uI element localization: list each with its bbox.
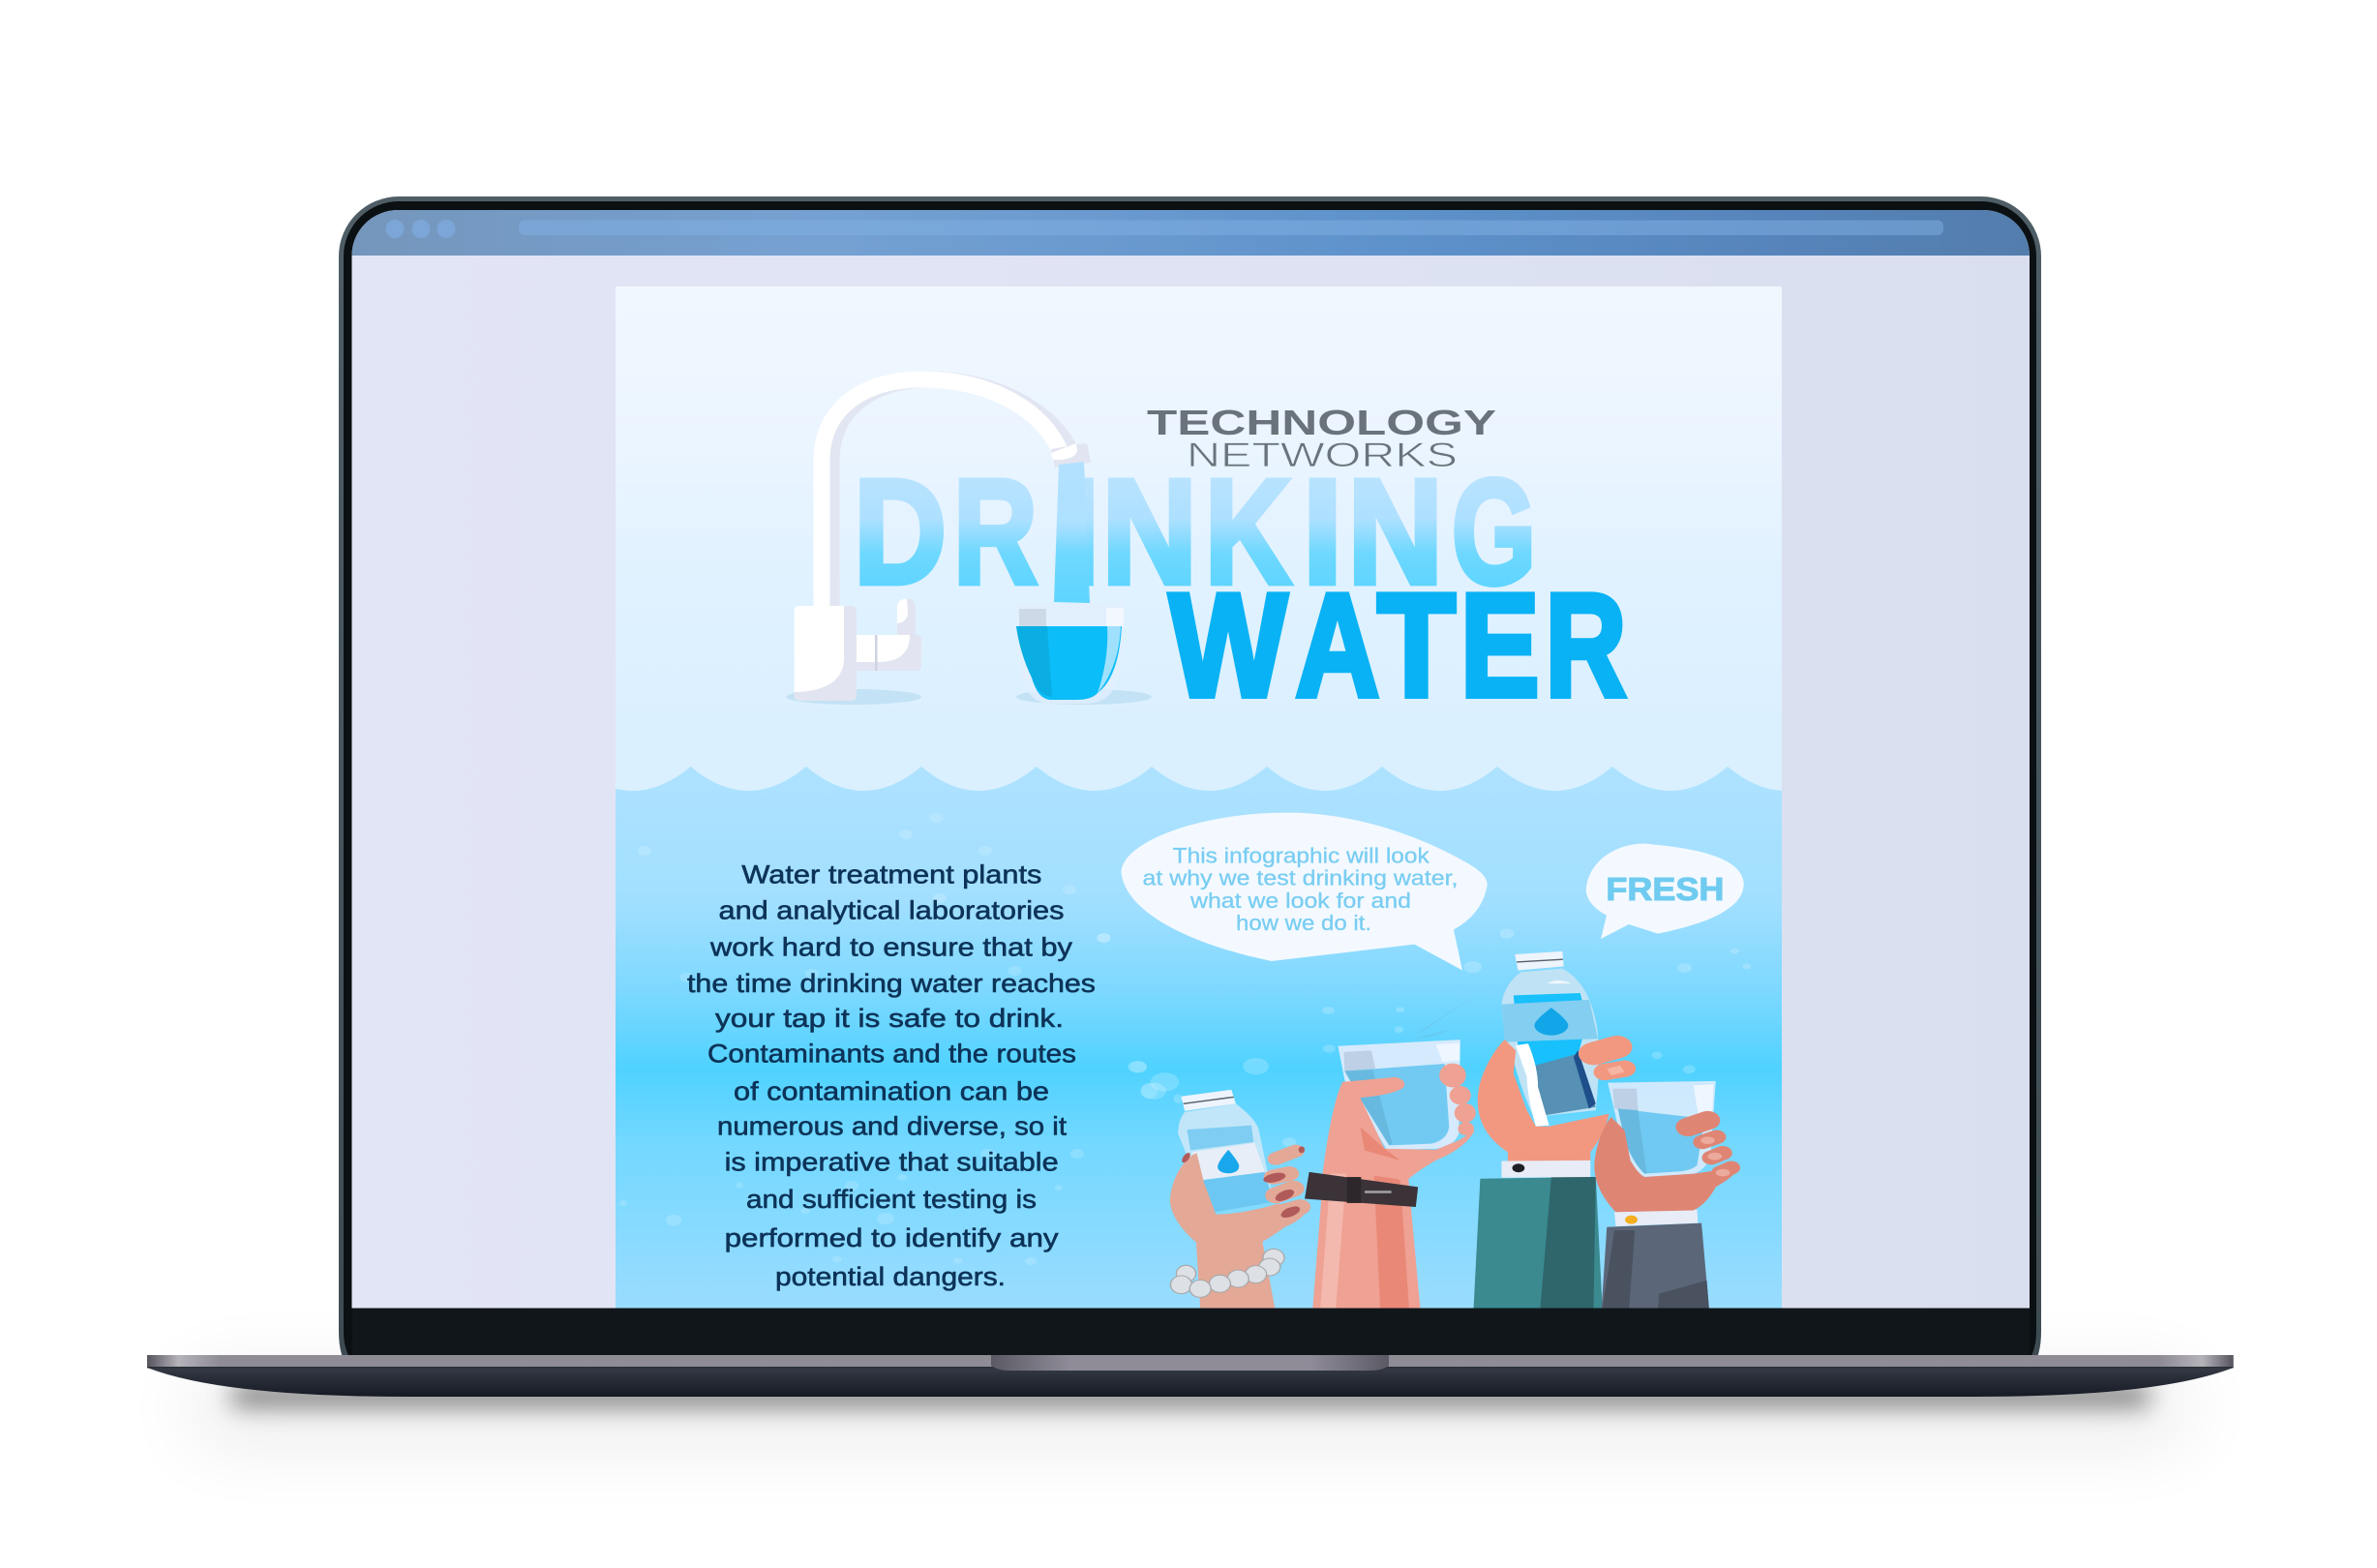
hinge notch	[991, 1355, 1389, 1371]
large bottle	[1501, 951, 1599, 1127]
title: water: A	[1295, 563, 1379, 728]
water background	[616, 765, 1782, 1309]
laptop lid frame	[339, 196, 2041, 1357]
intro paragraph: numerous and diverse, so it	[717, 1111, 1068, 1140]
hand	[1322, 1077, 1475, 1181]
glass water	[1344, 1064, 1449, 1145]
white cuff	[1614, 1210, 1698, 1226]
title: drinking: I	[1060, 448, 1100, 615]
forearm	[1196, 1237, 1275, 1309]
title: drinking: R	[953, 448, 1038, 615]
small bottle	[1178, 1090, 1274, 1213]
hand	[1594, 1117, 1740, 1212]
intro paragraph: Contaminants and the routes	[707, 1040, 1076, 1069]
hands illustration	[1097, 928, 1751, 1309]
faucet base	[795, 606, 857, 701]
white cuff	[1501, 1161, 1590, 1178]
green sleeve	[1474, 1177, 1603, 1309]
air bubbles	[619, 813, 1158, 1265]
splash lines	[1411, 996, 1475, 1039]
pearl bracelet	[1170, 1249, 1284, 1297]
address bar	[519, 221, 1943, 235]
fingers	[1274, 1151, 1300, 1212]
title: drinking: D	[854, 448, 947, 615]
faucet arch	[831, 379, 1072, 610]
wrist	[1617, 1204, 1695, 1213]
glass of water	[1014, 603, 1152, 705]
nails	[1180, 1146, 1305, 1220]
bubble text: how we do it.	[1236, 911, 1371, 935]
intro paragraph	[687, 859, 1096, 1291]
glass water	[1618, 1108, 1704, 1174]
title: drinking: N	[1347, 448, 1443, 615]
illustration bubbles	[1097, 928, 1751, 1147]
wrist	[1508, 1147, 1590, 1161]
faucet handle	[857, 599, 921, 671]
bubble text	[1142, 843, 1458, 935]
title: water: T	[1377, 563, 1456, 728]
intro paragraph: and analytical laboratories	[718, 895, 1065, 924]
palm	[1170, 1153, 1309, 1242]
intro paragraph: of contamination can be	[734, 1077, 1049, 1106]
bubble text: what we look for and	[1189, 889, 1411, 913]
title: drinking: I	[1303, 448, 1343, 615]
speech bubble: fresh	[1586, 844, 1744, 939]
bubble text: This infographic will look	[1173, 843, 1430, 867]
intro paragraph: Water treatment plants	[741, 859, 1041, 889]
intro paragraph: work hard to ensure that by	[709, 933, 1073, 962]
laptop	[147, 196, 2234, 1397]
title: water: R	[1545, 563, 1626, 728]
hand with small bottle	[1170, 1090, 1309, 1309]
water stream	[1054, 462, 1090, 603]
speech bubble: intro	[1121, 813, 1488, 970]
browser title bar	[352, 210, 2030, 256]
brand logo	[1148, 410, 1496, 467]
palm	[1478, 1040, 1610, 1152]
window dots	[385, 220, 455, 238]
hand with large bottle	[1474, 951, 1625, 1309]
glass water	[1016, 626, 1122, 700]
small glass	[1608, 1081, 1716, 1177]
title: drinking: N	[1101, 448, 1197, 615]
bubble text: at why we test drinking water,	[1142, 866, 1458, 890]
glass shadow	[1016, 689, 1152, 705]
title: drinking: G	[1452, 448, 1536, 615]
screen	[352, 210, 2030, 1309]
wave scallops	[616, 765, 1782, 791]
intro paragraph: and sufficient testing is	[746, 1185, 1037, 1214]
faucet	[786, 379, 1091, 705]
intro paragraph: the time drinking water reaches	[687, 969, 1096, 998]
fingers	[1688, 1121, 1731, 1173]
watch	[1305, 1172, 1418, 1207]
fingers	[1593, 1047, 1625, 1072]
intro paragraph: is imperative that suitable	[725, 1148, 1059, 1177]
laptop drop shadow	[194, 1374, 2187, 1442]
intro paragraph: potential dangers.	[775, 1262, 1006, 1291]
intro paragraph: performed to identify any	[725, 1223, 1059, 1252]
hand with large glass	[1305, 1040, 1476, 1309]
infographic page	[575, 286, 1843, 1309]
arm	[1312, 1167, 1420, 1309]
faucet shadow	[786, 689, 921, 705]
glass	[1339, 1040, 1460, 1150]
title: water: W	[1169, 563, 1287, 728]
NETWORKS: NETWORKS	[1187, 437, 1458, 474]
fingers	[1439, 1064, 1476, 1135]
laptop base	[147, 1355, 2234, 1397]
grey sleeve	[1602, 1223, 1709, 1309]
title: water: E	[1460, 563, 1540, 728]
intro paragraph: your tap it is safe to drink.	[715, 1004, 1064, 1033]
fresh label: FRESH	[1606, 871, 1724, 907]
faucet spout tip	[1051, 443, 1091, 467]
title: drinking: K	[1205, 448, 1291, 615]
hand with small glass	[1594, 1081, 1740, 1309]
glass body	[1029, 689, 1113, 704]
header background	[616, 286, 1782, 792]
TECHNOLOGY: TECHNOLOGY	[1147, 403, 1496, 442]
